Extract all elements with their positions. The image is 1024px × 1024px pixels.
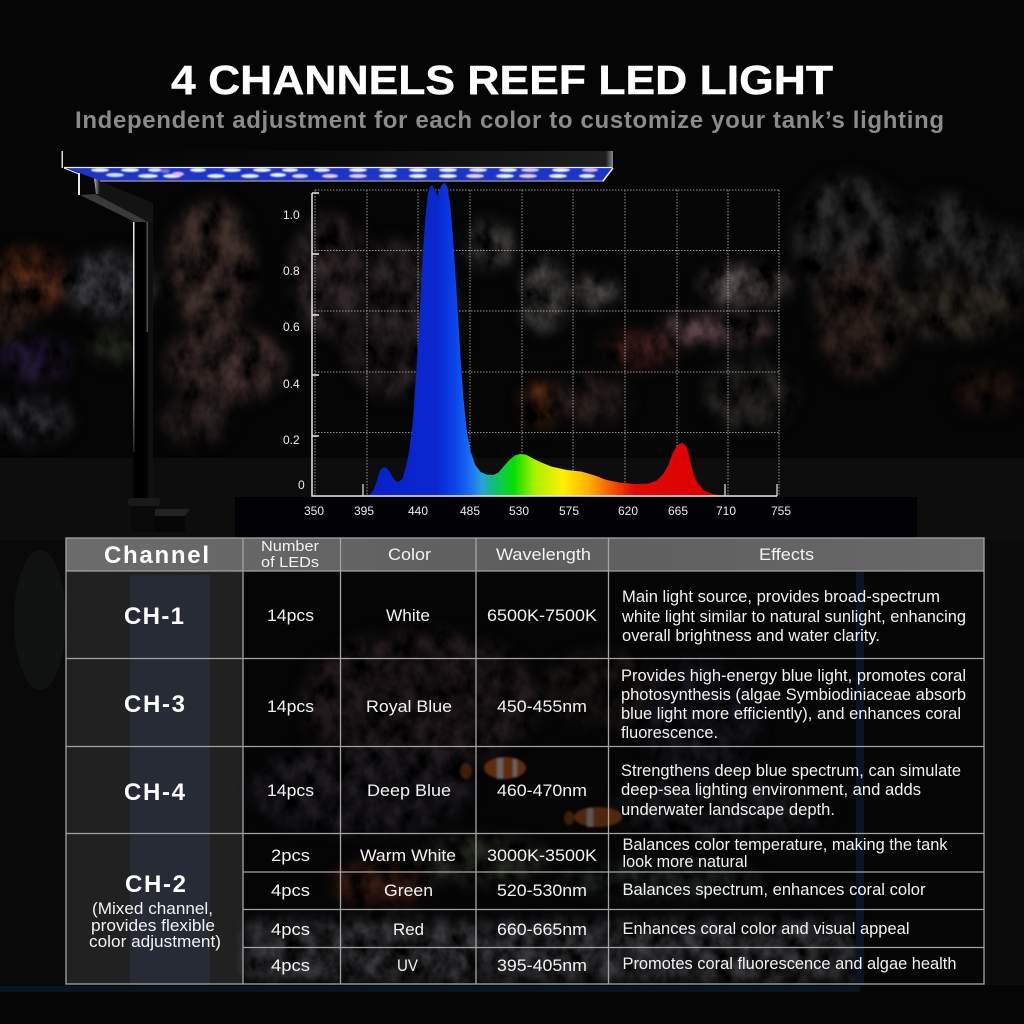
y axis labels: 0 [298,478,305,492]
row: Warm White: Balances color temperature, making the tank [622,835,948,854]
row: CH-2 channel label: provides flexible [91,917,215,935]
x axis labels: 665 [668,504,688,518]
table header [104,538,814,571]
row: CH-1 [124,587,966,645]
row: CH-3: 14pcs [267,698,314,716]
row: CH-3: Provides high-energy blue light, promotes coral [621,666,966,685]
LED light fixture [62,151,613,532]
fixture arm [78,170,153,222]
spectrum curve [365,183,725,496]
LED strip [64,168,613,181]
row: CH-4: 460-470nm [497,782,587,800]
table header: Channel [104,542,209,569]
y axis labels [283,208,305,492]
table grid lines [66,538,984,984]
row: Green: 4pcs [271,882,310,900]
row: CH-4: deep-sea lighting environment, and adds [621,780,921,799]
row: Warm White: 3000K-3500K [487,847,597,865]
row: UV: Promotes coral fluorescence and algae health [622,954,956,973]
row: UV [271,954,956,975]
fixture pole [128,222,190,532]
row: CH-3: 450-455nm [497,698,587,716]
table header: of LEDs [261,554,319,571]
row: CH-3: blue light more efficiently), and enhances coral [621,704,961,723]
row: Green: Green [384,882,433,900]
row: CH-3: Royal Blue [366,698,452,716]
table fills [66,538,984,984]
reef upper scene [0,175,1024,445]
row: CH-4 [124,761,961,819]
row: Warm White: Warm White [360,847,456,865]
y axis labels: 0.4 [283,377,300,391]
x axis labels: 440 [408,504,428,518]
tank lower scene [0,458,1024,1024]
x axis labels: 755 [771,504,791,518]
row: CH-2 channel label [89,871,221,951]
clownfish [460,757,622,827]
row: CH-3: fluorescence. [621,723,718,742]
row: CH-1: White [386,607,430,625]
table header: Number [261,538,319,555]
row: CH-2 channel label: (Mixed channel, [92,900,213,918]
background: dim reef aquarium photo [0,173,1024,992]
subtitle: Independent adjustment for each color to customize your tank’s lighting [75,107,944,134]
x axis labels: 710 [716,504,736,518]
chart axes [312,193,777,496]
y axis labels: 0.2 [283,433,300,447]
row: Warm White: 2pcs [271,847,310,865]
row: Warm White: look more natural [622,852,748,871]
row: UV: 4pcs [271,957,310,975]
row: CH-1: overall brightness and water clarity. [622,626,880,645]
row: Red: Enhances coral color and visual appeal [622,919,910,938]
row: CH-2 channel label: CH-2 [125,871,186,898]
title: 4 CHANNELS REEF LED LIGHT [171,57,833,103]
row: CH-4: 14pcs [267,782,314,800]
x axis labels: 350 [304,504,324,518]
x axis labels: 395 [354,504,374,518]
row: UV: 395-405nm [497,957,587,975]
x axis labels: 530 [509,504,529,518]
row: Red: 660-665nm [497,921,587,939]
fixture top housing [62,151,613,168]
spectrum chart [283,183,791,518]
y axis labels: 1.0 [283,208,300,222]
row: Warm White [271,835,948,871]
x axis labels: 620 [618,504,638,518]
row: CH-1: 6500K-7500K [487,607,597,625]
chart grid [315,190,779,496]
x axis labels: 485 [460,504,480,518]
row: Red: Red [393,921,424,939]
table header: Color [388,546,432,564]
row: CH-2 channel label: color adjustment) [89,933,221,951]
row: CH-3 [124,666,966,742]
specification table [66,538,984,984]
row: Green [271,880,926,900]
row: CH-4: Strengthens deep blue spectrum, can simulate [621,761,961,780]
row: CH-4: underwater landscape depth. [621,800,835,819]
table header: Wavelength [496,546,591,564]
x axis labels [304,504,791,518]
row: UV: UV [397,957,418,975]
row: CH-3: CH-3 [124,691,185,718]
row: CH-1: 14pcs [267,607,314,625]
y axis labels: 0.8 [283,264,300,278]
row: Green: Balances spectrum, enhances coral color [622,880,926,899]
row: CH-1: white light similar to natural sunlight, enhancing [621,607,966,626]
row: Green: 520-530nm [497,882,587,900]
row: Red: 4pcs [271,921,310,939]
row: CH-1: CH-1 [124,603,184,630]
row: CH-1: Main light source, provides broad-spectrum [622,587,940,606]
table header: Effects [759,546,814,564]
x axis labels: 575 [559,504,579,518]
row: Red [271,919,910,939]
row: CH-3: photosynthesis (algae Symbiodiniaceae absorb [621,685,966,704]
row: CH-4: Deep Blue [367,782,451,800]
row: CH-4: CH-4 [124,779,186,806]
y axis labels: 0.6 [283,320,300,334]
